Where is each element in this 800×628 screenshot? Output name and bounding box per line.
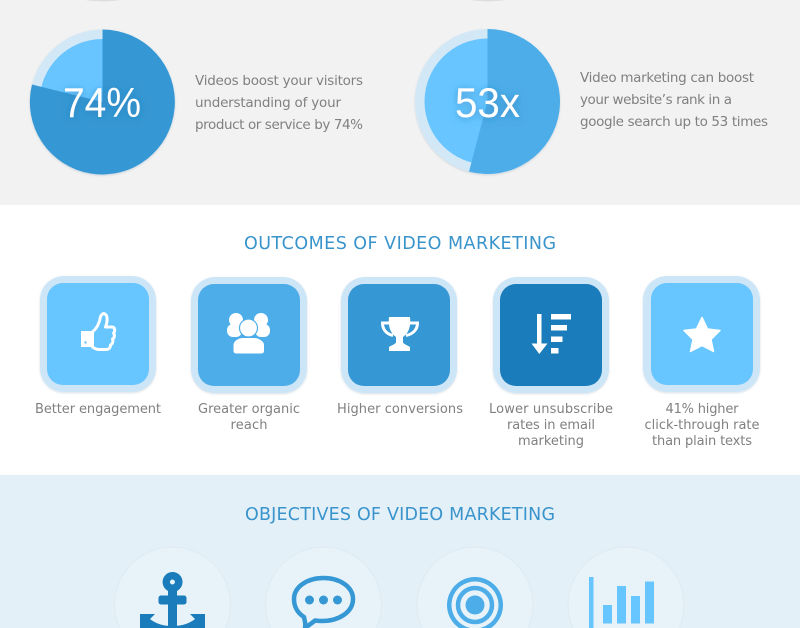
objective: speech bubble (266, 547, 382, 628)
card: greater organic reach (191, 277, 307, 433)
heading: objectives: OBJECTIVES OF VIDEO MARKETING (245, 505, 555, 525)
label: greater organic reach: reach (230, 418, 268, 433)
label: higher click-through rate: 41% higher (666, 402, 739, 417)
label: higher click-through rate: than plain texts (652, 434, 752, 449)
text: understanding stat: product or service by 74% (195, 117, 363, 133)
card: lower unsubscribe rates (489, 277, 613, 449)
panel: statistics (0, 0, 800, 205)
icon: group of people (227, 313, 270, 354)
heading: outcomes: OUTCOMES OF VIDEO MARKETING (244, 234, 556, 254)
card: better engagement (35, 276, 161, 417)
label: higher click-through rate: click-through rate (644, 418, 760, 433)
objective: bar chart (568, 547, 684, 628)
icon: sort descending (532, 314, 571, 354)
icon: anchor (140, 572, 205, 628)
panel: outcomes (0, 205, 800, 475)
label: greater organic reach (198, 402, 300, 433)
icon: target (447, 577, 503, 628)
panel: objectives (0, 475, 800, 628)
card: higher conversions (337, 277, 463, 417)
text: understanding stat: understanding of your (195, 95, 341, 111)
icon: bar chart (589, 577, 654, 628)
icon: star (684, 318, 720, 352)
icon: trophy (382, 317, 418, 351)
label: higher conversions: Higher conversions (337, 402, 463, 417)
label: greater organic reach: Greater organic (198, 402, 300, 417)
text: understanding stat (195, 73, 363, 133)
objective: target (417, 547, 533, 628)
objective: anchor (115, 547, 230, 628)
text: search rank stat: your website’s rank in a (580, 92, 732, 108)
label: lower unsubscribe rates: marketing (518, 434, 584, 449)
icon: speech bubble (294, 578, 353, 628)
stat value: 74%: 74% (63, 79, 141, 126)
pie chart: 53x (415, 29, 560, 174)
label: lower unsubscribe rates (489, 402, 613, 449)
label: lower unsubscribe rates: rates in email (507, 418, 595, 433)
card: higher click-through rate (643, 276, 760, 449)
text: search rank stat: Video marketing can boost (580, 70, 754, 86)
text: search rank stat: google search up to 53 times (580, 114, 768, 130)
label: higher click-through rate (644, 402, 760, 449)
icon: thumbs up (81, 314, 115, 350)
label: lower unsubscribe rates: Lower unsubscribe (489, 402, 613, 417)
pie chart: 74% (30, 30, 175, 174)
text: understanding stat: Videos boost your visitors (195, 73, 363, 89)
text: search rank stat (580, 70, 768, 130)
stat value: 53x: 53x (455, 79, 520, 126)
label: better engagement: Better engagement (35, 402, 161, 417)
